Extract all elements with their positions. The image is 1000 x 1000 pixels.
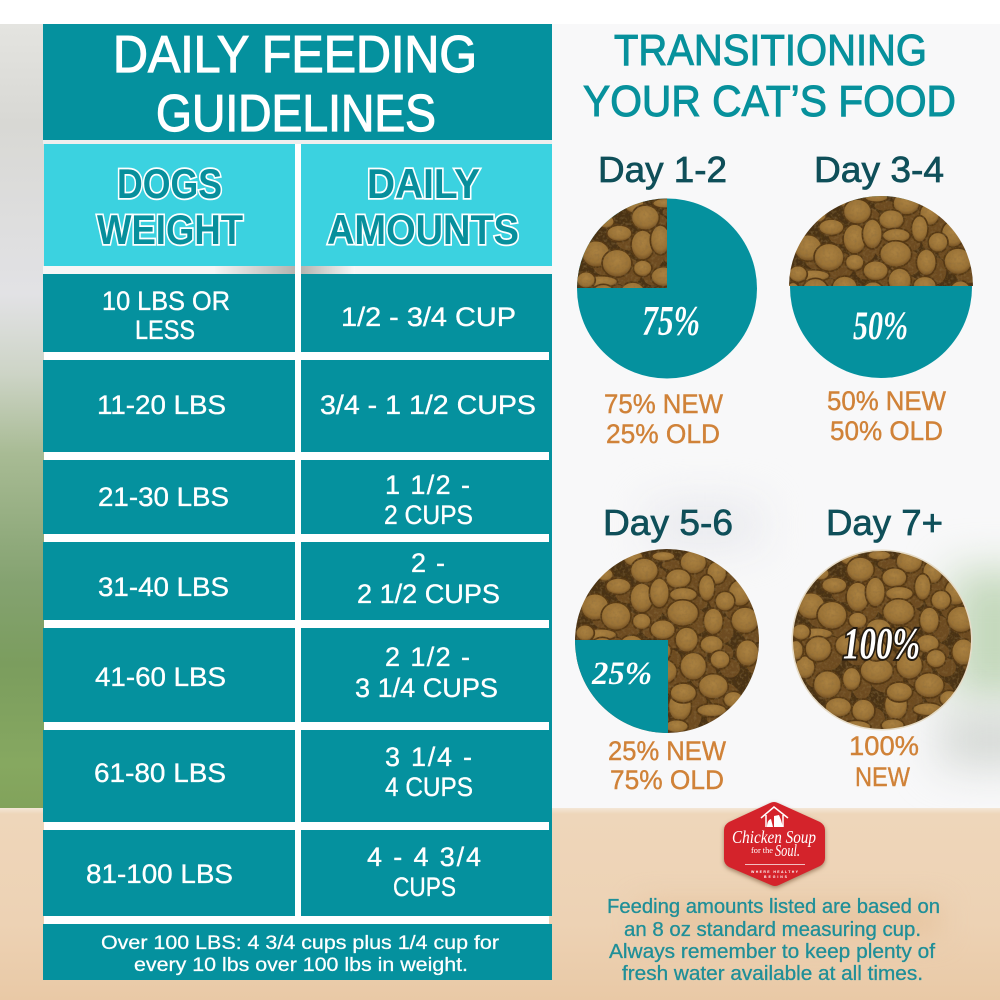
row: 81-100 lbs: CUPS — [393, 872, 456, 902]
panel: feeding table — [43, 24, 552, 980]
panel: day 7+: NEW — [855, 762, 910, 792]
panel: day 1-2: 75% NEW — [604, 389, 723, 419]
row: 41-60 lbs: 41-60 LBS — [95, 662, 226, 692]
row: 21-30 lbs: 21-30 LBS — [98, 482, 229, 512]
row: 41-60 lbs — [43, 628, 549, 722]
panel: day 1-2 — [577, 156, 757, 444]
row: 81-100 lbs: 81-100 LBS — [86, 859, 233, 889]
row: 41-60 lbs: 2 1/2 - — [385, 642, 470, 672]
row: 31-40 lbs: 31-40 LBS — [98, 572, 229, 602]
logo: chicken soup for the soul — [724, 802, 825, 886]
panel: day 3-4: Day 3-4 — [814, 149, 944, 190]
column header: daily amounts — [301, 144, 552, 266]
text block: feeding note: an 8 oz standard measuring cup. — [624, 919, 921, 941]
panel: day 7+ — [792, 510, 972, 786]
column header: dogs weight — [44, 144, 295, 266]
pie chart: 75 percent: 75% — [642, 299, 700, 345]
pie chart: 25 percent: 25% — [591, 656, 652, 692]
pie chart: 100 percent — [792, 550, 972, 730]
row: 31-40 lbs — [43, 542, 549, 620]
pie chart: 75 percent — [577, 198, 757, 378]
column header: daily amounts: DAILY — [367, 160, 480, 207]
logo: chicken soup for the soul: for the — [751, 846, 773, 855]
row: 31-40 lbs: 2 - — [411, 548, 445, 578]
heading: transitioning your cat's food: YOUR CAT’S FOOD — [583, 77, 956, 126]
text block: feeding note: Feeding amounts listed are based on — [607, 896, 940, 918]
row: 21-30 lbs — [43, 460, 549, 534]
row: 41-60 lbs: 3 1/4 CUPS — [355, 673, 498, 703]
row: 61-80 lbs — [43, 730, 549, 822]
row: 11-20 lbs: 3/4 - 1 1/2 CUPS — [320, 390, 536, 420]
logo: chicken soup for the soul: Chicken Soup — [732, 827, 816, 847]
panel: day 1-2: Day 1-2 — [598, 149, 727, 190]
panel: day 5-6 — [575, 509, 759, 790]
column header: dogs weight: DOGS — [117, 160, 222, 207]
text block: feeding note: fresh water available at all times. — [622, 963, 923, 985]
row: 10 lbs or less: LESS — [135, 315, 195, 345]
column header: dogs weight: WEIGHT — [97, 206, 243, 253]
row: 11-20 lbs — [43, 360, 549, 452]
footer note: over 100 lbs: every 10 lbs over 100 lbs in weight. — [134, 955, 468, 976]
title: daily feeding guidelines — [43, 24, 552, 143]
panel: day 5-6: 75% OLD — [610, 765, 724, 795]
text block: feeding note: Always remember to keep plenty of — [609, 941, 935, 963]
panel: day 1-2: 25% OLD — [606, 419, 720, 449]
row: 10 lbs or less — [43, 274, 549, 352]
row: 31-40 lbs: 2 1/2 CUPS — [357, 579, 500, 609]
row: 21-30 lbs: 1 1/2 - — [385, 470, 470, 500]
row: 11-20 lbs: 11-20 LBS — [97, 390, 226, 420]
panel: day 7+: 100% — [849, 731, 919, 761]
panel: day 5-6: Day 5-6 — [603, 502, 733, 543]
pie chart: 25 percent — [575, 549, 759, 733]
logo: chicken soup for the soul: BEGINS — [764, 875, 788, 879]
logo: chicken soup for the soul: WHERE HEALTHY — [751, 870, 799, 874]
row: 61-80 lbs: 61-80 LBS — [94, 758, 226, 788]
icon: house with pets — [761, 807, 788, 827]
title: daily feeding guidelines: GUIDELINES — [156, 85, 436, 143]
text block: feeding note — [607, 896, 940, 985]
row: 61-80 lbs: 3 1/4 - — [385, 742, 472, 772]
panel: day 3-4: 50% OLD — [830, 416, 943, 446]
footer note: over 100 lbs: Over 100 LBS: 4 3/4 cups plus 1/4 cup for — [101, 933, 500, 954]
panel: day 7+: Day 7+ — [826, 502, 943, 543]
panel: day 3-4: 50% NEW — [827, 386, 946, 416]
heading: transitioning your cat's food: TRANSITIONING — [614, 26, 927, 75]
panel: day 5-6: 25% NEW — [608, 736, 726, 766]
footer note: over 100 lbs — [43, 924, 552, 980]
pie chart: 50 percent — [789, 196, 973, 378]
panel: day 3-4 — [789, 156, 973, 440]
heading: transitioning your cat's food — [583, 26, 956, 126]
row: 10 lbs or less: 1/2 - 3/4 CUP — [341, 302, 516, 332]
logo: chicken soup for the soul: Soul. — [775, 841, 800, 860]
row: 21-30 lbs: 2 CUPS — [384, 500, 473, 530]
pie chart: 100 percent: 100% — [843, 619, 920, 668]
pie chart: 50 percent: 50% — [853, 303, 908, 348]
row: 10 lbs or less: 10 LBS OR — [102, 286, 230, 316]
title: daily feeding guidelines: DAILY FEEDING — [113, 26, 477, 84]
column header: daily amounts: AMOUNTS — [327, 206, 519, 253]
row: 81-100 lbs — [43, 830, 549, 916]
row: 81-100 lbs: 4 - 4 3/4 — [367, 842, 481, 872]
row: 61-80 lbs: 4 CUPS — [385, 772, 473, 802]
